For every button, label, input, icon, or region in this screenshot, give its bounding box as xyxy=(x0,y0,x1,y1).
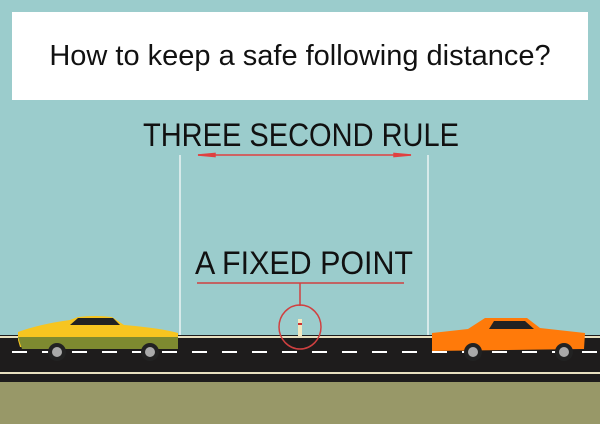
orange car xyxy=(432,318,585,361)
vertical guide lines xyxy=(180,155,428,348)
title box: How to keep a safe following distance? xyxy=(49,40,551,72)
fixed point post with circle xyxy=(279,305,321,349)
label: fixed point: A FIXED POINT xyxy=(195,245,413,281)
yellow car xyxy=(18,316,178,361)
road xyxy=(0,335,600,424)
label: three second rule: THREE SECOND RULE xyxy=(143,117,459,153)
arrow: distance xyxy=(198,154,411,156)
title box xyxy=(12,12,588,100)
